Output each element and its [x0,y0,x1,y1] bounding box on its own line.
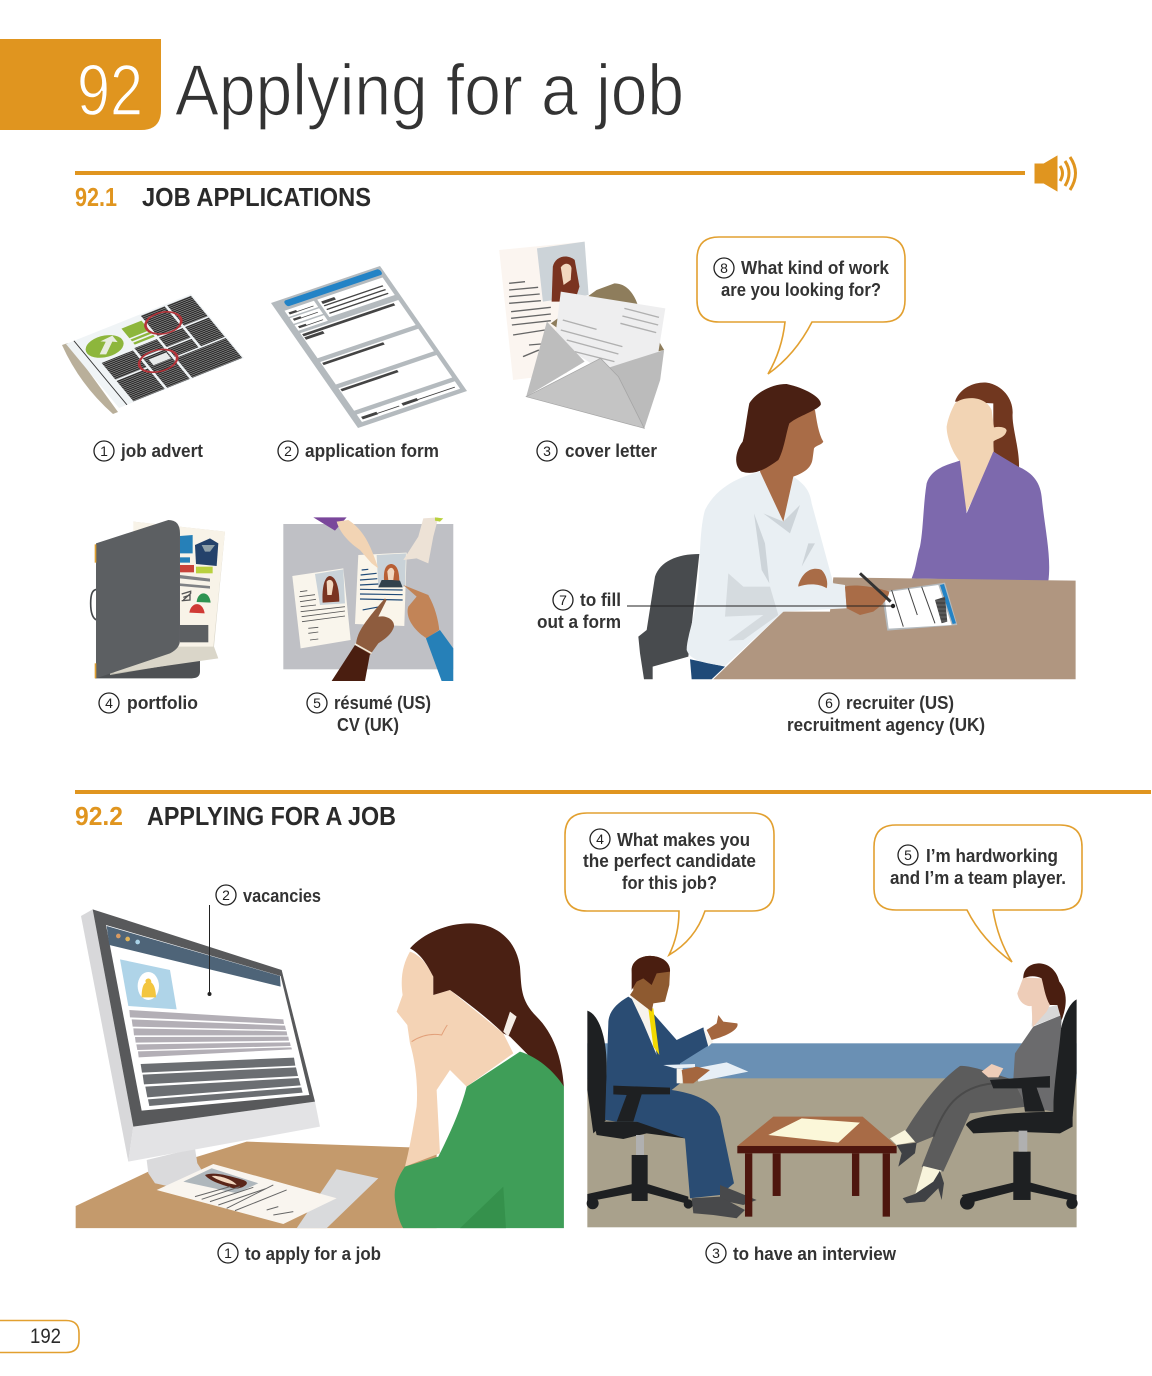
label: recruiter / recruitment agency: recruitment agency (UK) [787,714,985,735]
label: vacancies with leader line: vacancies [243,885,321,906]
label: resume / CV: 5 [313,695,321,711]
label: resume / CV: CV (UK) [337,714,399,735]
speech bubble 4: What makes you [617,829,750,850]
label: vacancies with leader line [208,885,321,996]
label: to apply for a job: to apply for a job [245,1243,381,1264]
label: portfolio [99,692,198,713]
label: recruiter / recruitment agency: 6 [825,695,833,711]
label: to fill out a form with leader line: to fill [580,589,621,610]
section heading 92.2: 92.2 [75,801,123,831]
label: to fill out a form with leader line [537,589,895,632]
icon: portfolio [91,520,225,678]
label: to have an interview: to have an interview [733,1243,897,1264]
label: portfolio: portfolio [127,692,198,713]
speech bubble 8 [697,237,905,374]
label: to apply for a job: 1 [224,1245,232,1261]
page number [0,1320,79,1352]
icon: cover letter and envelope [499,242,665,428]
section heading 92.1: JOB APPLICATIONS [142,182,371,212]
illustration: recruiter and candidate at a desk [638,383,1076,679]
label: job advert: 1 [100,443,108,459]
label: resume / CV: résumé (US) [334,692,431,713]
illustration: applying online at a computer [76,909,564,1228]
speech bubble 5 [874,825,1082,962]
speech bubble 4: the perfect candidate [583,850,756,871]
label: to fill out a form with leader line: 7 [559,592,567,608]
speech bubble 5: 5 [904,847,912,863]
speech bubble 4 [565,813,774,955]
illustration: job interview [587,956,1078,1227]
title: Applying for a job [175,51,684,131]
chapter number tab: 92 [77,51,143,131]
page number: 192 [30,1325,61,1348]
label: application form: application form [305,440,439,461]
coffee table [737,1117,897,1217]
candidate chair [960,999,1078,1210]
label: recruiter / recruitment agency: recruiter (US) [846,692,954,713]
section heading 92.1: 92.1 [75,182,117,212]
icon: application form [271,266,467,428]
speech bubble 4: for this job? [622,872,717,893]
label: cover letter: 3 [543,443,551,459]
speech bubble 8: are you looking for? [721,279,881,300]
section heading 92.2: APPLYING FOR A JOB [147,801,396,831]
speech bubble 4: 4 [596,831,604,847]
label: resume / CV [307,692,431,735]
label: job advert: job advert [120,440,203,461]
icon: audio speaker [1036,157,1076,190]
icon: resume with pointing hands [283,517,453,681]
label: to fill out a form with leader line: out a form [537,611,621,632]
speech bubble 5: and I’m a team player. [890,867,1066,888]
interviewer chair [587,1011,693,1209]
chapter number tab [0,39,161,131]
label: portfolio: 4 [105,695,113,711]
label: recruiter / recruitment agency [787,692,985,735]
speech bubble 8: What kind of work [741,257,890,278]
label: to have an interview: 3 [712,1245,720,1261]
icon: job advert newspaper [62,294,244,414]
label: application form: 2 [284,443,292,459]
speech bubble 5: I’m hardworking [926,845,1058,866]
label: vacancies with leader line: 2 [222,887,230,903]
label: cover letter: cover letter [565,440,657,461]
speech bubble 8: 8 [720,260,728,276]
